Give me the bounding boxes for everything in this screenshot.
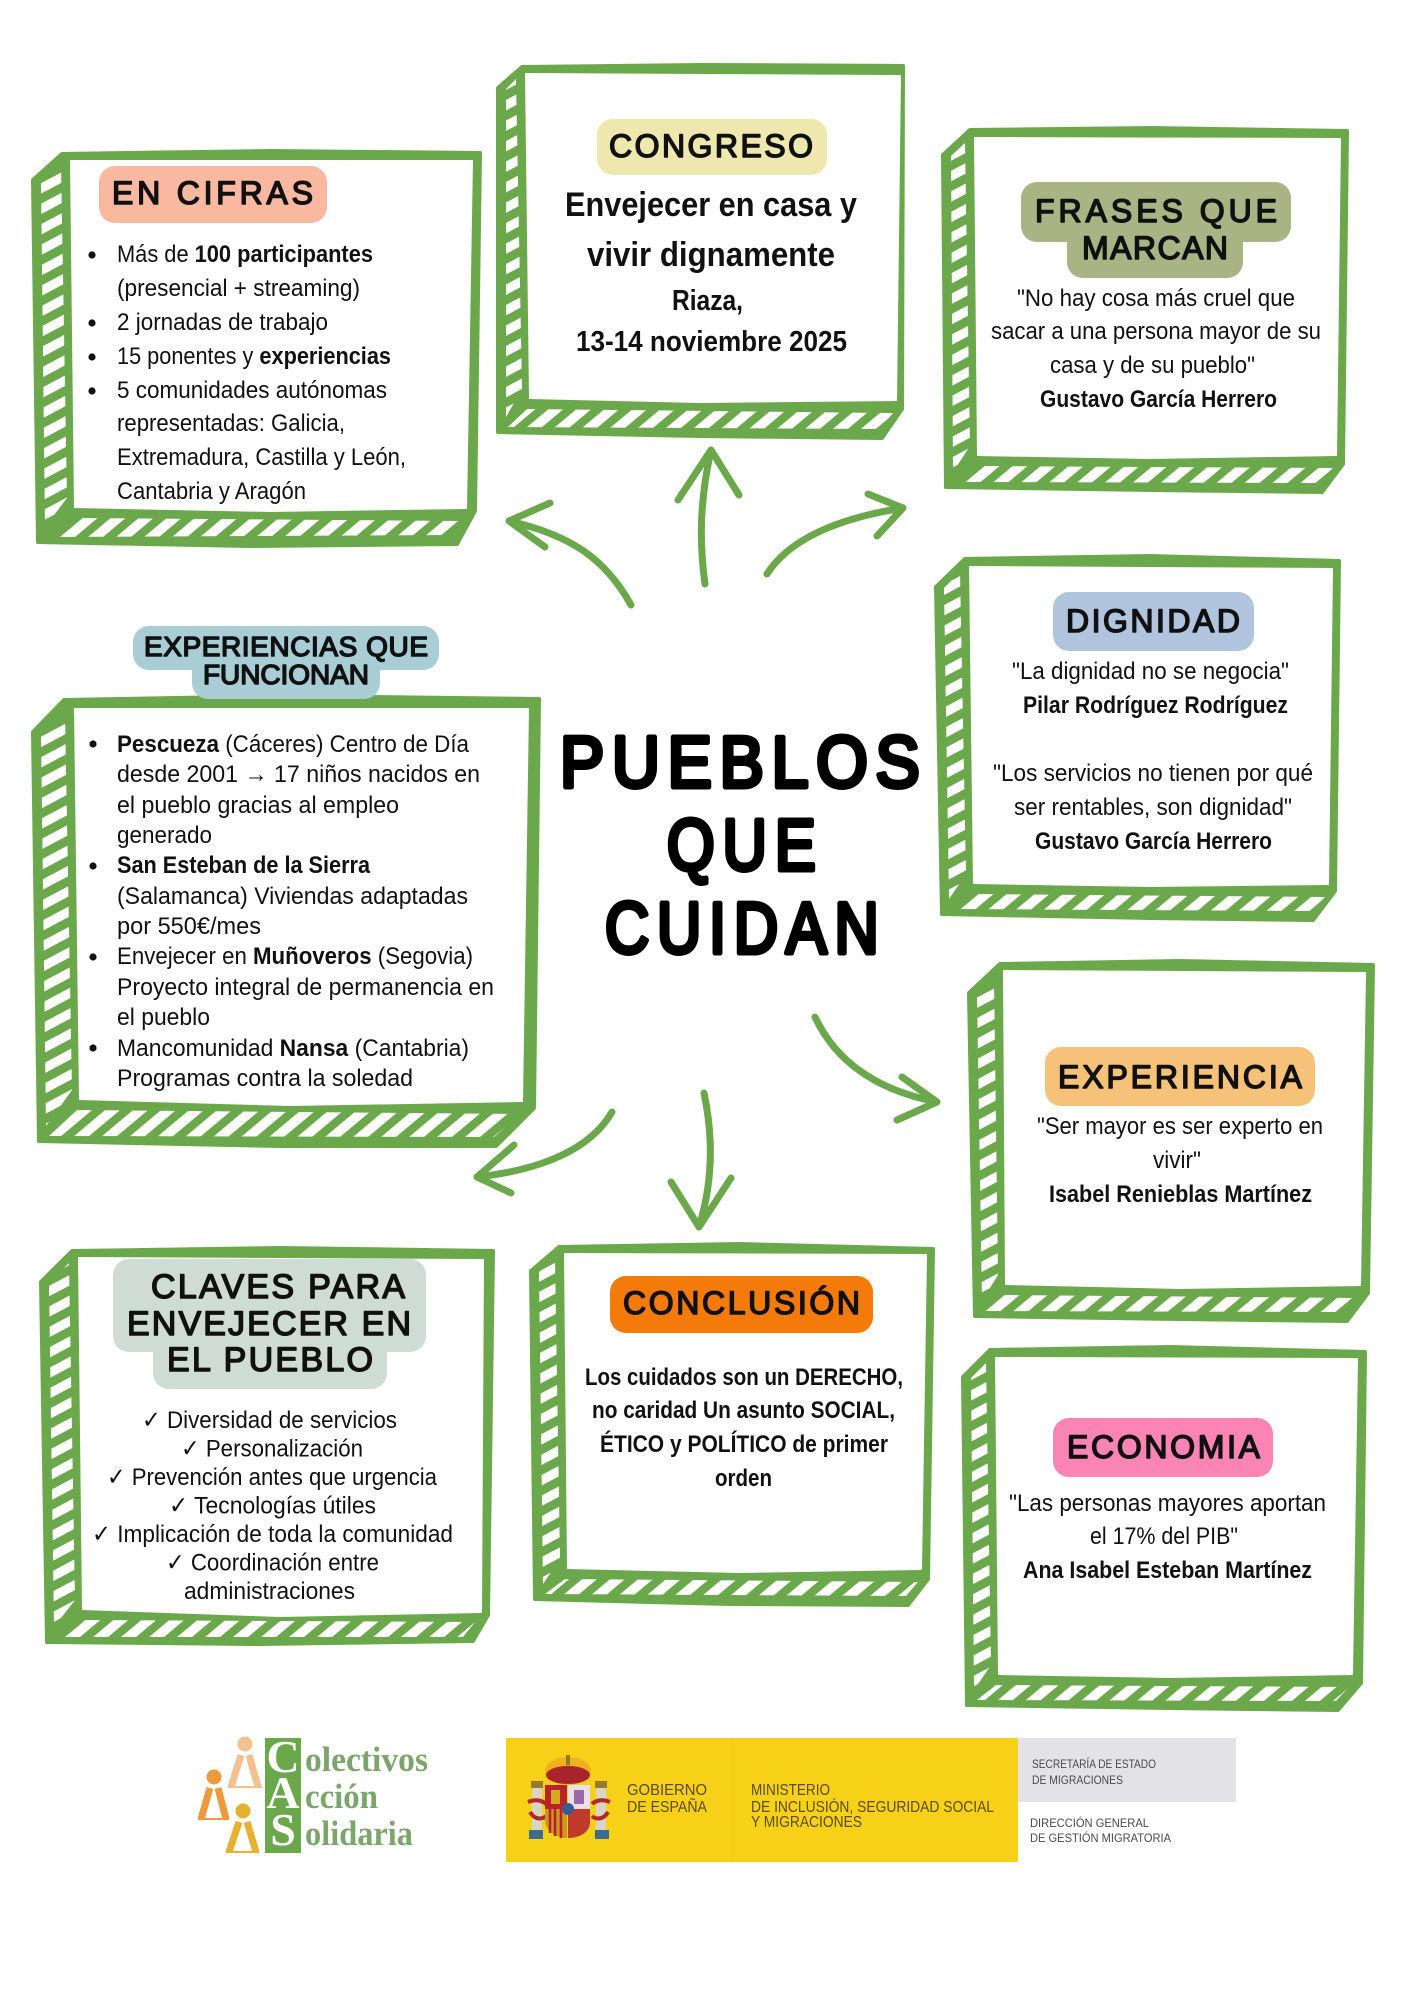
text: dignidad quotes: "La dignidad no se negocia" [1012,658,1289,685]
text: experiencias list: Mancomunidad Nansa (Cantabria) [117,1035,469,1062]
heading: congreso [597,119,827,175]
panel: congreso [498,65,903,438]
text: economia quote: Ana Isabel Esteban Martínez [1023,1557,1312,1584]
panel: conclusión [531,1244,933,1605]
text: claves list: ✓ Implicación de toda la comunidad [92,1521,453,1548]
text: experiencia quote: "Ser mayor es ser experto en [1037,1113,1323,1140]
heading: dignidad [1053,592,1254,651]
heading: claves [113,1259,426,1389]
text: experiencias list: por 550€/mes [117,913,261,940]
heading: frases que marcan: MARCAN [1082,230,1228,266]
text: experiencias list: el pueblo gracias al empleo [117,792,399,819]
panel: experiencia [969,961,1373,1321]
text: conclusión body [585,1364,903,1492]
text: experiencias list: Pescueza (Cáceres) Centro de Día [117,731,470,758]
icon: orange figure [198,1770,229,1819]
heading: frases que marcan: FRASES QUE [1035,193,1277,229]
text: experiencias list: desde 2001 → 17 niños nacidos en [117,761,480,788]
text: dignidad quotes: Pilar Rodríguez Rodríguez [1023,692,1288,719]
text: gobierno de españa: DE ESPAÑA [627,1796,707,1816]
arrow: to experiencia [815,1017,937,1120]
heading: experiencias que funcionan: FUNCIONAN [203,659,369,690]
text: claves list: administraciones [184,1578,355,1605]
text: dirección general: DIRECCIÓN GENERAL [1030,1817,1150,1830]
text: frases quote: sacar a una persona mayor de su [991,318,1321,345]
heading: congreso: CONGRESO [609,128,813,164]
panel: economia [963,1347,1365,1710]
text: congreso details: vivir dignamente [587,236,835,274]
text: congreso details: Riaza, [672,285,743,317]
title: CUIDAN [605,889,879,969]
text: experiencias list [89,731,494,1092]
text: conclusión body: orden [715,1465,772,1492]
heading: conclusión [610,1276,873,1333]
heading: experiencias que funcionan [133,626,439,699]
heading: claves: CLAVES PARA [151,1268,405,1306]
text: experiencia quote: Isabel Renieblas Martínez [1049,1181,1312,1208]
text: experiencias list: (Salamanca) Viviendas adaptadas [117,883,468,910]
heading: en cifras: EN CIFRAS [112,175,313,211]
logo: colectivos acción solidaria: olectivos [305,1740,428,1779]
text: experiencia quote: vivir" [1153,1147,1201,1174]
text: congreso details [565,186,857,358]
text: gobierno de españa: GOBIERNO [627,1782,707,1799]
text: economia quote: "Las personas mayores aportan [1009,1490,1326,1517]
text: ministerio [751,1782,994,1831]
icon: peach figure [228,1737,262,1787]
text: dirección general [1030,1817,1171,1845]
logo: colectivos acción solidaria: cción [305,1777,378,1816]
heading: conclusión: CONCLUSIÓN [623,1285,860,1321]
text: en cifras list: 5 comunidades autónomas [117,377,387,404]
heading: economia [1053,1418,1273,1477]
text: gobierno de españa [627,1782,707,1816]
logo: colectivos acción solidaria: A [266,1767,300,1818]
text: ministerio: Y MIGRACIONES [751,1814,862,1831]
logo: gobierno de españa [506,1738,1236,1862]
heading: frases que marcan [1021,182,1291,278]
arrow: to frases [767,494,903,574]
arrow: to congreso [678,450,739,584]
logo: colectivos acción solidaria: S [270,1804,296,1855]
text: conclusión body: Los cuidados son un DERECHO, [585,1364,903,1391]
panel: experiencias que funcionan [33,626,539,1146]
text: experiencias list: el pueblo [117,1004,210,1031]
text: dirección general: DE GESTIÓN MIGRATORIA [1030,1832,1171,1845]
text: en cifras list: Extremadura, Castilla y León, [117,444,406,471]
text: dignidad quotes: ser rentables, son dignidad" [1014,794,1292,821]
text: experiencia quote [1037,1113,1323,1208]
text: experiencias list: generado [117,822,212,849]
text: dignidad quotes [993,658,1313,855]
heading: economia: ECONOMIA [1067,1429,1261,1465]
panel: frases que marcan [943,128,1347,492]
heading: experiencia [1045,1047,1315,1106]
title: PUEBLOS [560,721,920,803]
heading: claves: ENVEJECER EN [127,1305,411,1343]
logo: colectivos acción solidaria: C [266,1731,300,1782]
text: en cifras list: (presencial + streaming) [117,275,360,302]
panel: en cifras [33,151,480,546]
text: congreso details: Envejecer en casa y [565,186,857,224]
text: claves list: ✓ Prevención antes que urgencia [107,1464,437,1491]
text: ministerio: DE INCLUSIÓN, SEGURIDAD SOCIAL [751,1799,994,1816]
title [560,721,920,969]
text: experiencias list: San Esteban de la Sierra [117,852,371,879]
arrow: to conclusión [671,1093,731,1227]
text: secretaría de estado [1032,1758,1156,1787]
text: economia quote [1009,1490,1326,1584]
text: claves list: ✓ Diversidad de servicios [142,1407,397,1434]
text: en cifras list: Cantabria y Aragón [117,478,306,505]
panel: dignidad [936,556,1339,920]
arrow: to en cifras [509,503,631,605]
text: en cifras list: 2 jornadas de trabajo [117,309,328,336]
text: experiencias list: Envejecer en Muñoveros (Segovia) [117,943,473,970]
text: claves list: ✓ Coordinación entre [166,1550,379,1576]
icon: coat of arms [528,1755,610,1839]
text: economia quote: el 17% del PIB" [1090,1523,1238,1550]
heading: experiencias que funcionan: EXPERIENCIAS QUE [144,631,428,662]
text: en cifras list: 15 ponentes y experiencias [117,343,391,370]
text: en cifras list [88,241,406,505]
heading: en cifras [99,166,327,223]
text: frases quote: "No hay cosa más cruel que [1017,285,1295,312]
icon: yellow figure [226,1804,259,1852]
panel: claves para envejecer en el pueblo [41,1248,493,1644]
text: frases quote: Gustavo García Herrero [1040,386,1277,413]
heading: dignidad: DIGNIDAD [1066,603,1240,639]
text: en cifras list: representadas: Galicia, [117,410,345,437]
title: QUE [667,806,816,886]
text: claves list: ✓ Tecnologías útiles [169,1492,376,1520]
text: dignidad quotes: Gustavo García Herrero [1035,828,1272,855]
text: secretaría de estado: SECRETARÍA DE ESTADO [1032,1758,1156,1771]
text: frases quote: casa y de su pueblo" [1050,352,1255,379]
text: congreso details: 13-14 noviembre 2025 [576,326,847,358]
logo: colectivos acción solidaria [198,1731,428,1855]
text: conclusión body: no caridad Un asunto SOCIAL, [592,1397,895,1424]
text: experiencias list: Proyecto integral de permanencia en [117,974,494,1001]
text: dignidad quotes: "Los servicios no tienen por qué [993,760,1313,787]
text: frases quote [991,285,1321,413]
text: claves list [92,1407,453,1605]
text: conclusión body: ÉTICO y POLÍTICO de primer [600,1430,888,1458]
arrow: to experiencias [477,1112,612,1193]
text: experiencias list: Programas contra la soledad [117,1065,413,1092]
text: claves list: ✓ Personalización [181,1436,363,1462]
text: secretaría de estado: DE MIGRACIONES [1032,1775,1123,1787]
heading: claves: EL PUEBLO [167,1341,373,1379]
text: en cifras list: Más de 100 participantes [117,241,373,268]
text: ministerio: MINISTERIO [751,1782,830,1799]
logo: colectivos acción solidaria: olidaria [305,1814,413,1853]
heading: experiencia: EXPERIENCIA [1058,1059,1303,1095]
